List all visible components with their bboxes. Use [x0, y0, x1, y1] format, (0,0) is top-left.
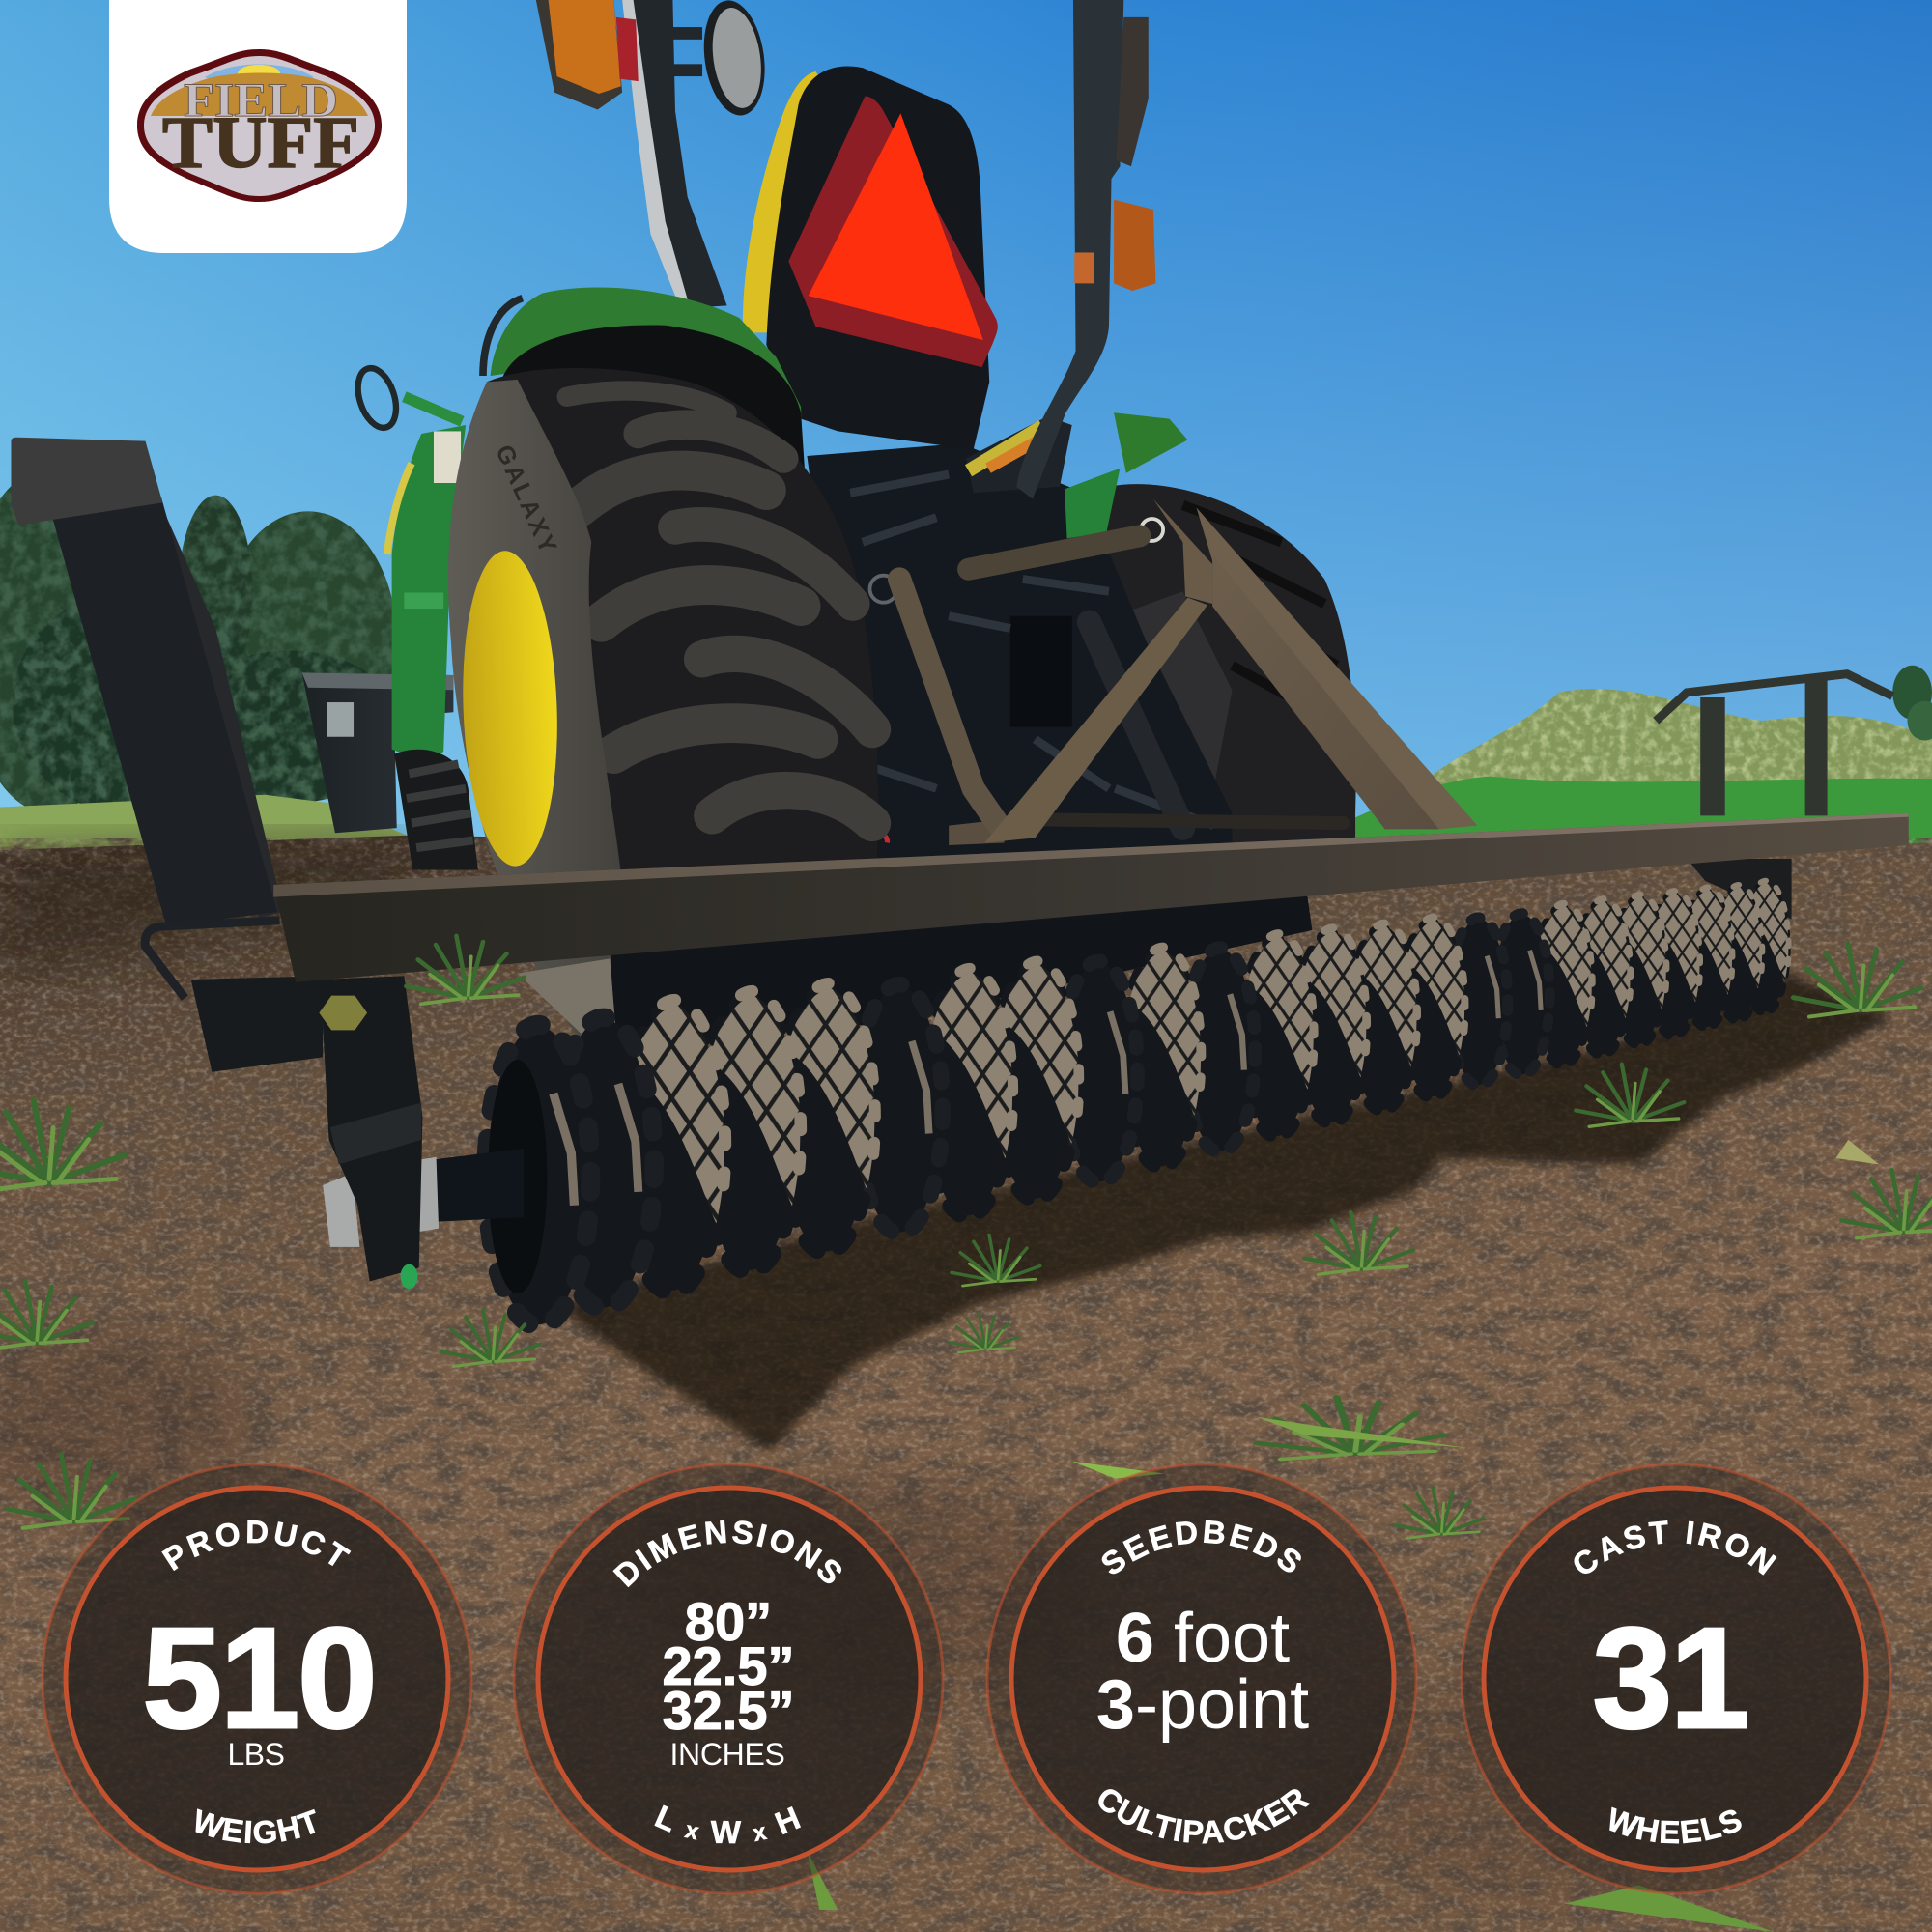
front small tyre: [394, 750, 478, 870]
right hill of tall grass: [1433, 689, 1932, 784]
left amber lamp: [536, 0, 639, 110]
big rear tyre: [448, 368, 878, 1037]
hitch links: [899, 536, 1343, 828]
roller axle: [323, 1149, 524, 1247]
tilled soil ground: [0, 836, 1932, 1932]
three-point triangle frame: [984, 499, 1477, 842]
stat badge: seedbeds cultipacker: 6 foot: [1116, 1600, 1290, 1677]
stat badge: product weight: PRODUCT: [161, 1520, 352, 1571]
far grass strip: [0, 795, 407, 853]
Field Tuff logo badge: FIELD: [184, 72, 338, 127]
far right rear tyre: [1096, 484, 1356, 868]
rear tyre foot under beam: [518, 958, 616, 1037]
stat badge: seedbeds cultipacker: CULTIPACKER: [1098, 1789, 1310, 1844]
stat badge: seedbeds cultipacker: 3-point: [1096, 1666, 1309, 1744]
stat badge: dimensions: DIMENSIONS: [612, 1520, 841, 1588]
stat badge: cast iron wheels: WHEELS: [1609, 1806, 1742, 1843]
stat badge: dimensions: L x W x H: [654, 1804, 801, 1843]
stat badge: product weight: 510: [143, 1599, 375, 1758]
green loader arm and front ring: [351, 363, 466, 764]
roller shadow on soil: [554, 974, 1891, 1452]
sky: [0, 0, 1932, 985]
stat badge: seedbeds cultipacker: SEEDBEDS: [1101, 1520, 1301, 1575]
dark gap under the beam: [610, 887, 1312, 1047]
stat badge: cast iron wheels: 31: [1593, 1599, 1747, 1758]
left bracket and vertical post: [145, 921, 422, 1289]
work lamp: [671, 0, 772, 120]
black frame arm left: [11, 438, 283, 926]
Field Tuff logo badge: [137, 49, 382, 202]
left roll bar: [622, 0, 727, 308]
right roll bar: [1016, 0, 1149, 499]
background tree line: [0, 486, 395, 806]
right amber lamp: [1114, 200, 1155, 291]
tyre sidewall: [448, 380, 622, 1037]
tractor rear body and machinery: [807, 416, 1233, 894]
stat badge: dimensions: INCHES: [669, 1737, 785, 1772]
big rear tyre: GALAXY: [490, 441, 562, 559]
right handle rail: [1656, 674, 1892, 815]
tyre lugs: [567, 391, 872, 823]
main horizontal beam: [273, 813, 1909, 982]
Field Tuff logo badge: TUFF: [162, 102, 359, 184]
yellow wheel rim: [458, 550, 562, 867]
stat badge: dimensions: 22.5”: [663, 1635, 794, 1696]
tyre tread: [487, 368, 878, 924]
grass clumps and leaves on soil: [0, 936, 1932, 1932]
tractor seat: [743, 67, 989, 450]
stat badge: product weight: [41, 1463, 473, 1895]
stat badge: dimensions: [512, 1463, 945, 1895]
green rear fender: [483, 287, 805, 469]
slow moving vehicle triangle sign: [788, 96, 998, 367]
stat badge: cast iron wheels: [1461, 1463, 1891, 1895]
stat badge: dimensions: 32.5”: [663, 1680, 794, 1741]
logo card: [109, 0, 407, 253]
far end mesh drum: [1687, 859, 1792, 920]
stat badge: cast iron wheels: CAST IRON: [1575, 1520, 1777, 1576]
stat badge: product weight: LBS: [228, 1737, 284, 1772]
tree at far right: [1892, 666, 1932, 741]
stat badge: seedbeds cultipacker: [985, 1463, 1418, 1895]
stat badge: product weight: WEIGHT: [195, 1808, 316, 1843]
right green fender: [1065, 412, 1188, 538]
stat badge: dimensions: 80”: [685, 1591, 772, 1652]
front loader bucket: [301, 672, 453, 833]
green crop row: [1343, 777, 1932, 863]
cultipacker roller wheels: [486, 881, 1789, 1326]
